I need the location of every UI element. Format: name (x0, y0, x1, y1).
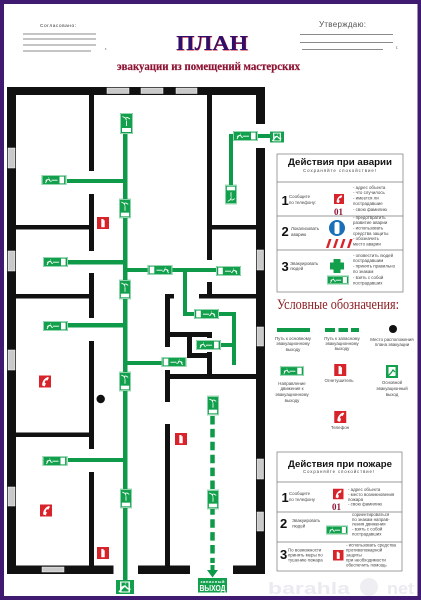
panel: actions in a fire: 3 (280, 547, 287, 562)
plan markers: extinguishers and phones (39, 217, 187, 559)
legend: direction sign: движения к (280, 386, 304, 391)
legend: main route (275, 328, 312, 352)
legend: phone: Телефон (331, 425, 350, 430)
panel: actions in a fire: пожара (348, 497, 364, 502)
legend: extinguisher: Огнетушитель (324, 378, 354, 383)
panel: actions in an emergency: развитие аварии (353, 220, 388, 225)
legend: main route: Путь к основному (275, 336, 312, 341)
panel: actions in an emergency: людей (290, 266, 304, 271)
panel: actions in a fire: 1 (282, 490, 289, 505)
panel: actions in a fire: противопожарной (346, 548, 383, 552)
legend: main exit: эвакуационный (376, 386, 408, 391)
panel: actions in a fire: тушению пожара (288, 558, 323, 562)
title: ПЛАН (176, 31, 248, 55)
panel: actions in an emergency: 3 (282, 259, 289, 274)
panel: actions in a fire: по знакам направ- (352, 517, 390, 522)
legend: extinguisher (324, 364, 354, 383)
watermark (268, 578, 414, 598)
panel: actions in an emergency: 01 (334, 207, 344, 217)
evacuation route: reserve dashed (210, 416, 215, 563)
panel: actions in an emergency: средства защиты (353, 231, 388, 236)
panel: actions in an emergency: пострадавшим (353, 258, 383, 263)
panel: actions in a fire: защиты (346, 552, 362, 558)
legend: reserve route (324, 328, 361, 351)
panel: actions in a fire: По возможности (288, 548, 322, 552)
panel: actions in a fire: Действия при пожаре (288, 459, 392, 469)
legend: plan location: Место расположения (370, 337, 414, 342)
panel: actions in a fire: 01 (332, 502, 342, 512)
legend: main route: эвакуационному (276, 341, 311, 346)
panel: actions in an emergency: Сохраняйте спокойствие! (303, 168, 376, 173)
panel: actions in an emergency: 1 (282, 193, 289, 208)
watermark: net (387, 579, 414, 598)
panel: actions in a fire: людей (292, 524, 306, 528)
panel: actions in an emergency: Действия при аварии (288, 157, 392, 167)
panel: actions in an emergency: - предотвратить (353, 215, 386, 220)
panel: actions in a fire: обеспечить помощь (346, 562, 387, 568)
watermark: barahla (268, 579, 351, 598)
evacuation routes: main (67, 130, 271, 585)
panel: actions in an emergency: 2 (282, 224, 289, 239)
panel: actions in a fire: при необходимости (346, 558, 386, 562)
panel: actions in an emergency: Эвакуировать (290, 261, 319, 266)
panel: actions in a fire: Сохраняйте спокойствие! (303, 469, 374, 474)
panel: actions in an emergency: - свою фамилию (353, 207, 388, 212)
floor plan walls (7, 87, 265, 574)
panel: actions in an emergency: место аварии (353, 242, 381, 246)
title: ПЛАН (176, 31, 248, 55)
panel: actions in a fire: - использовать средства (346, 542, 396, 548)
panel: actions in a fire: - адрес объекта (348, 487, 381, 492)
direction signs (42, 113, 258, 509)
panel: actions in an emergency (277, 154, 403, 292)
windows (8, 88, 264, 572)
arrow to reserve exit (207, 565, 218, 578)
subtitle: эвакуации из помещений мастерских (117, 61, 300, 73)
reserve exit sign: запасный (200, 579, 225, 584)
approval block: agreed: г. (105, 46, 107, 51)
panel: actions in a fire: Сообщите (289, 491, 311, 496)
panel: actions in a fire: 2 (280, 516, 287, 531)
panel: actions in an emergency: пострадавших (353, 280, 383, 286)
legend: main exit: выход (386, 392, 399, 397)
legend: main exit: Основной (382, 380, 403, 385)
legend: plan location: плана эвакуации (375, 342, 410, 347)
approval block: agreed (23, 23, 107, 51)
legend: main route: выходу (286, 347, 301, 352)
panel: actions in an emergency: - использовать (353, 226, 384, 230)
panel: actions in an emergency: Сообщите (289, 194, 311, 199)
panel: actions in a fire: ления движения (352, 522, 386, 526)
legend: direction sign (275, 366, 310, 403)
panel: actions in an emergency: - имеется ли (353, 196, 379, 200)
legend: direction sign: выходу (285, 398, 300, 403)
approval block: approved: Утверждаю: (319, 20, 366, 29)
approval block: agreed: Согласовано: (40, 23, 76, 29)
panel: actions in an emergency: пострадавшие (353, 201, 383, 206)
main exit signs (116, 132, 284, 594)
panel: actions in a fire: сориентироваться (352, 512, 390, 517)
panel: actions in an emergency: - обозначить (353, 236, 380, 241)
approval block: approved: г. (396, 45, 398, 50)
plan location marker (96, 395, 105, 403)
approval block: approved (300, 20, 398, 50)
reserve exit sign (198, 578, 227, 593)
panel: actions in an emergency: - что случилось (353, 190, 386, 195)
legend: direction sign: Направление (278, 381, 306, 386)
panel: actions in a fire: по телефону (289, 497, 316, 502)
panel: actions in a fire: - взять с собой (352, 526, 383, 532)
legend: reserve route: выходу (335, 346, 350, 351)
panel: actions in a fire: Эвакуировать (292, 518, 321, 523)
reserve exit sign: ВЫХОД (200, 584, 226, 593)
panel: actions in an emergency: - адрес объекта (353, 185, 386, 190)
panel: actions in an emergency: - оповестить людей (353, 253, 394, 258)
legend: reserve route: Путь к запасному (324, 336, 361, 341)
panel: actions in an emergency: по знакам (353, 269, 373, 274)
legend: plan location (370, 325, 414, 347)
panel: actions in a fire: - свою фамилию (348, 502, 383, 506)
panel: actions in an emergency: аварию (291, 232, 307, 237)
panel: actions in an emergency: по телефону: (289, 200, 316, 205)
panel: actions in a fire (277, 452, 402, 571)
legend: reserve route: эвакуационному (325, 341, 360, 346)
panel: actions in a fire: пострадавших (352, 532, 382, 536)
panel: actions in an emergency: - принять правильно (353, 264, 396, 268)
legend: phone (331, 411, 350, 430)
panel: actions in an emergency: Локализовать (291, 226, 320, 231)
legend: main exit (376, 365, 408, 397)
panel: actions in a fire: принять меры по (288, 552, 323, 558)
panel: actions in an emergency: - взять с собой (353, 275, 384, 280)
panel: actions in a fire: - место возникновения (348, 492, 395, 497)
legend: direction sign: эвакуационному (275, 392, 310, 397)
